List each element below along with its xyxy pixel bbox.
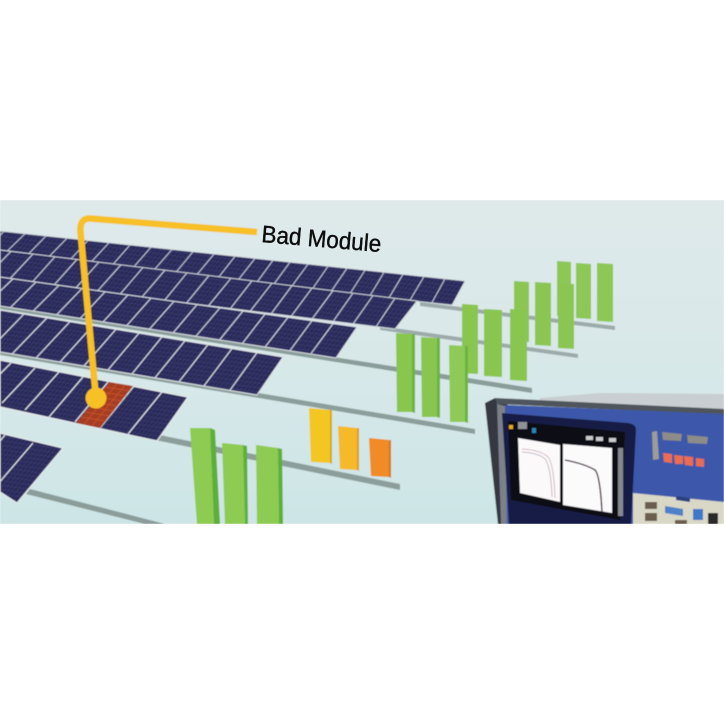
beam: fourth row (0, 350, 475, 434)
bars: second green group (514, 281, 574, 349)
bars: yellow and orange warning group (309, 408, 391, 478)
serial ports (652, 431, 708, 460)
callout label: Bad Module (260, 221, 382, 258)
solar array row 6 (0, 433, 63, 503)
bars: back green group (557, 261, 613, 322)
beam: back row (420, 302, 615, 330)
beam: second row (380, 326, 578, 358)
beam: sixth row (26, 489, 165, 524)
bars: front green group (190, 428, 283, 524)
instrument left bezel (484, 398, 508, 524)
instrument side strip (497, 404, 508, 524)
screen toolbar (509, 422, 623, 516)
screen interior (508, 421, 625, 520)
solar array row 2 (0, 248, 417, 329)
beam: third row (0, 305, 532, 393)
scene panel (0, 200, 724, 524)
callout leader line (80, 218, 257, 408)
bad module highlight (76, 382, 133, 428)
left chart (518, 438, 560, 502)
connector board (633, 493, 724, 524)
instrument blue front panel (505, 405, 724, 524)
screen frame (502, 413, 636, 524)
instrument top surface (540, 392, 724, 410)
beam: fifth row (150, 433, 400, 490)
bars: third green group (462, 304, 527, 381)
solar array row 3 (0, 275, 357, 358)
solar array row 4 (0, 304, 283, 395)
bars: fourth green group (396, 333, 468, 423)
connector ports (645, 496, 718, 524)
right chart (563, 444, 612, 513)
test instrument (485, 393, 724, 524)
solar array row 5 (0, 360, 188, 441)
red buttons (663, 453, 704, 467)
solar array row 1 (0, 229, 465, 305)
instrument top rail (495, 398, 724, 415)
